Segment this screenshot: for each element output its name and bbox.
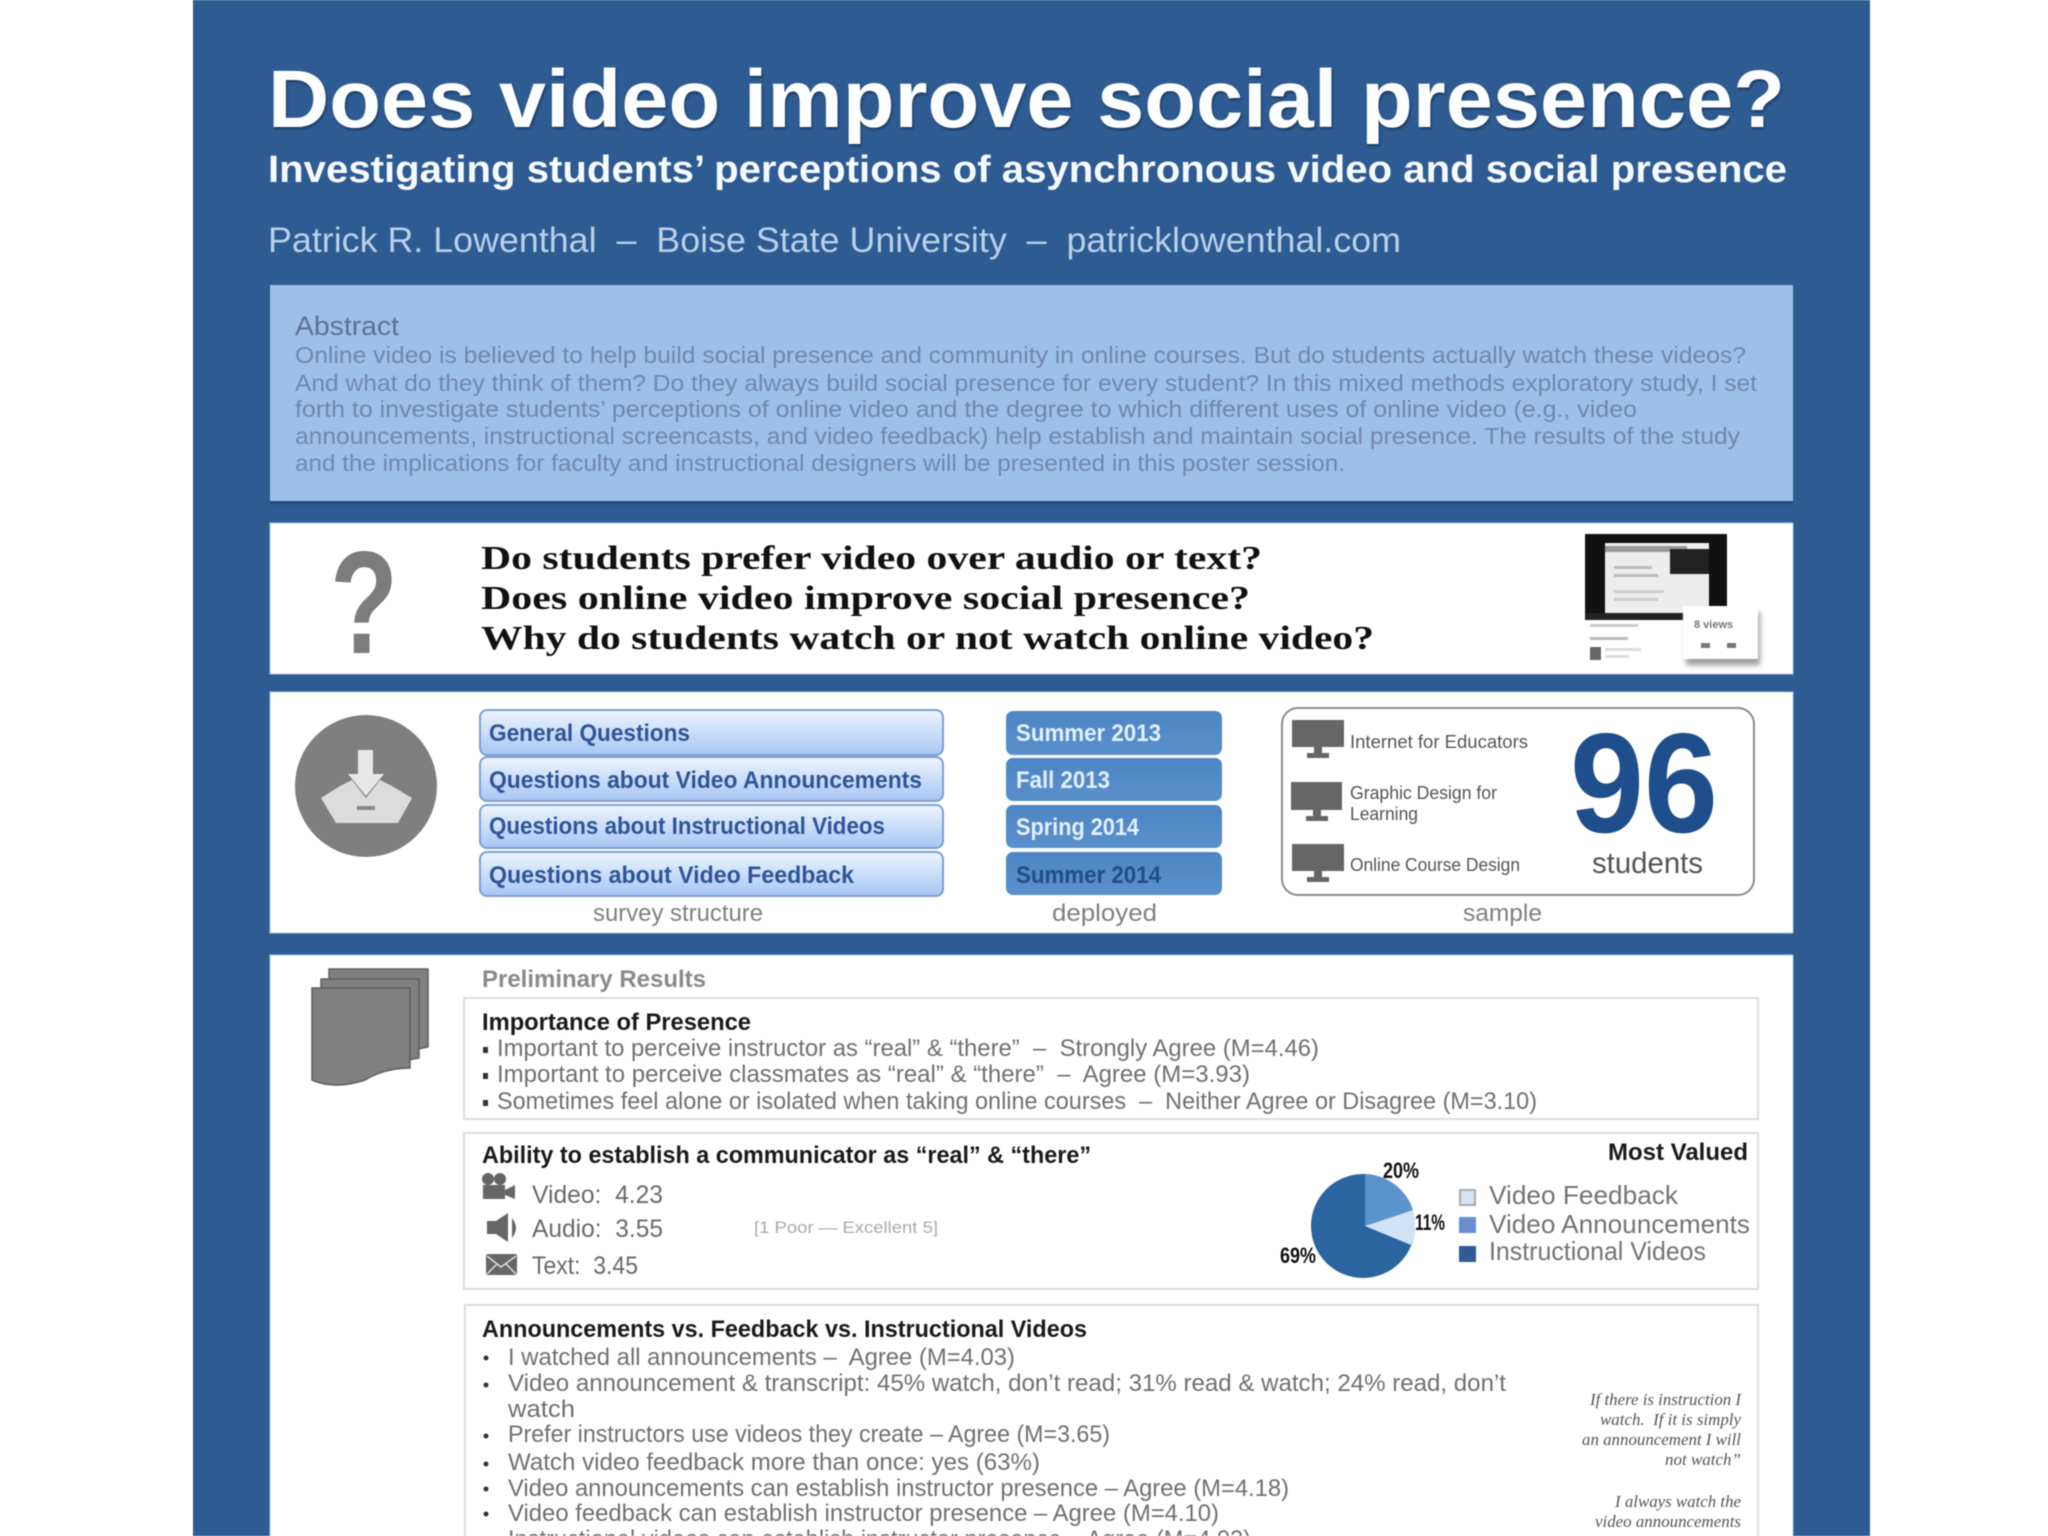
findings list: Watch video feedback more than once: yes (63%) bbox=[508, 1449, 1040, 1476]
student quotes: I always watch the bbox=[1614, 1492, 1741, 1511]
course list: Learning bbox=[1350, 804, 1418, 824]
abstract heading: Abstract bbox=[295, 311, 400, 341]
abstract text bbox=[295, 342, 1758, 476]
research questions text: Does online video improve social presence? bbox=[481, 580, 1250, 617]
findings list: Prefer instructors use videos they create – Agree (M=3.65) bbox=[508, 1421, 1110, 1448]
icon: download inbox bbox=[295, 715, 437, 857]
pie legend: Instructional Videos bbox=[1489, 1236, 1706, 1266]
ratings: Video: 4.23 bbox=[532, 1181, 663, 1209]
student quotes: an announcement I will bbox=[1582, 1430, 1741, 1449]
title: Does video improve social presence? bbox=[268, 54, 1785, 145]
panel: survey method bbox=[270, 692, 1793, 933]
pie chart: 20% bbox=[1383, 1158, 1419, 1183]
box: importance of presence: Importance of Presence bbox=[482, 1009, 751, 1036]
icon: monitors bbox=[1291, 720, 1344, 882]
survey structure buttons: General Questions bbox=[489, 720, 690, 747]
panel: abstract bbox=[270, 285, 1793, 504]
most valued heading: Most Valued bbox=[1608, 1139, 1748, 1166]
box: ability to establish a communicator: Ability to establish a communicator as “real” & “there” bbox=[482, 1142, 1091, 1169]
box: ability to establish a communicator: Text: 3.45 bbox=[532, 1252, 638, 1280]
abstract text: Online video is believed to help build social presence and community in online courses. But do students actually watch these videos? bbox=[295, 342, 1746, 368]
pie legend: Video Announcements bbox=[1489, 1209, 1750, 1239]
author line: Patrick R. Lowenthal – Boise State University – patricklowenthal.com bbox=[268, 221, 1401, 260]
research questions text: Do students prefer video over audio or text? bbox=[481, 540, 1262, 577]
deployed terms buttons bbox=[1006, 711, 1222, 895]
sample box bbox=[1282, 704, 1754, 895]
icon: question mark: ? bbox=[330, 521, 398, 684]
box: ability to establish a communicator bbox=[464, 1133, 1758, 1289]
findings list: Video feedback can establish instructor presence – Agree (M=4.10) bbox=[508, 1500, 1219, 1527]
survey structure buttons: Questions about Video Announcements bbox=[489, 767, 922, 794]
course list: Online Course Design bbox=[1350, 855, 1520, 875]
icon: speaker bbox=[487, 1213, 516, 1242]
student quotes: If there is instruction I bbox=[1589, 1390, 1742, 1409]
survey structure caption: survey structure bbox=[593, 900, 763, 927]
pie legend: Video Feedback bbox=[1489, 1180, 1679, 1210]
abstract text: announcements, instructional screencasts, and video feedback) help establish and maintain social presence. The results of the study bbox=[295, 423, 1741, 449]
student quotes: not watch” bbox=[1665, 1450, 1741, 1469]
deployed terms buttons: Summer 2014 bbox=[1016, 862, 1162, 889]
abstract text: and the implications for faculty and instructional designers will be presented in this poster session. bbox=[295, 450, 1345, 476]
icon: stacked documents bbox=[312, 969, 428, 1085]
research questions text: Why do students watch or not watch online video? bbox=[481, 620, 1374, 657]
survey structure buttons bbox=[480, 710, 943, 896]
results heading: Preliminary Results bbox=[482, 966, 706, 993]
research questions text bbox=[481, 540, 1374, 657]
course list: Graphic Design for bbox=[1350, 783, 1497, 803]
survey structure buttons: Questions about Video Feedback bbox=[489, 862, 855, 889]
findings list bbox=[484, 1344, 1506, 1536]
pie chart: 11% bbox=[1415, 1210, 1445, 1235]
abstract text: forth to investigate students’ perceptions of online video and the degree to which different uses of online video (e.g., video bbox=[295, 396, 1637, 422]
box: importance of presence: Sometimes feel alone or isolated when taking online courses – Neither Agree or Disagree (M=3.10) bbox=[497, 1088, 1537, 1115]
findings list: watch bbox=[507, 1396, 575, 1423]
panel: preliminary results bbox=[270, 955, 1793, 1536]
deployed terms buttons: Summer 2013 bbox=[1016, 720, 1161, 747]
course list bbox=[1350, 732, 1528, 875]
rating scale note: [1 Poor — Excellent 5] bbox=[754, 1218, 938, 1237]
box: ability to establish a communicator: Audio: 3.55 bbox=[532, 1215, 663, 1243]
pie legend bbox=[1459, 1180, 1750, 1266]
box: importance of presence: Important to perceive classmates as “real” & “there” – Agree (M=3.93) bbox=[497, 1061, 1250, 1088]
panel: research questions bbox=[270, 521, 1793, 684]
deployed caption: deployed bbox=[1052, 900, 1157, 927]
abstract text: And what do they think of them? Do they always build social presence for every student? In this mixed methods exploratory study, I set bbox=[295, 370, 1758, 396]
sample number: 96 bbox=[1570, 704, 1718, 863]
findings list: Video announcement & transcript: 45% watch, don’t read; 31% read & watch; 24% read, don’t bbox=[508, 1370, 1506, 1397]
deployed terms buttons: Fall 2013 bbox=[1016, 767, 1110, 794]
findings list: Video announcements can establish instructor presence – Agree (M=4.18) bbox=[508, 1475, 1289, 1502]
box: importance of presence bbox=[464, 998, 1758, 1119]
icon: envelope bbox=[486, 1254, 517, 1275]
survey structure buttons: Questions about Instructional Videos bbox=[489, 813, 885, 840]
icon: video screenshot bbox=[1585, 534, 1760, 665]
pie chart bbox=[1280, 1158, 1445, 1278]
icon: video camera bbox=[482, 1173, 515, 1199]
student quotes: video announcements bbox=[1595, 1512, 1741, 1531]
students label: students bbox=[1592, 847, 1703, 880]
box: announcements vs feedback vs instructional videos: Announcements vs. Feedback vs. Instructional Videos bbox=[482, 1316, 1087, 1343]
subtitle: Investigating students’ perceptions of asynchronous video and social presence bbox=[268, 149, 1787, 191]
deployed terms buttons: Spring 2014 bbox=[1016, 814, 1140, 841]
box: announcements vs feedback vs instructional videos bbox=[465, 1305, 1758, 1536]
findings list: I watched all announcements – Agree (M=4.03) bbox=[508, 1344, 1015, 1371]
box: importance of presence: Important to perceive instructor as “real” & “there” – Strongly Agree (M=4.46) bbox=[497, 1035, 1319, 1062]
sample caption: sample bbox=[1463, 900, 1542, 927]
pie chart: 69% bbox=[1280, 1243, 1316, 1268]
course list: Internet for Educators bbox=[1350, 732, 1528, 752]
student quotes: watch. If it is simply bbox=[1600, 1410, 1741, 1429]
student quotes bbox=[1582, 1390, 1742, 1531]
icon: video screenshot: 8 views bbox=[1694, 619, 1733, 631]
